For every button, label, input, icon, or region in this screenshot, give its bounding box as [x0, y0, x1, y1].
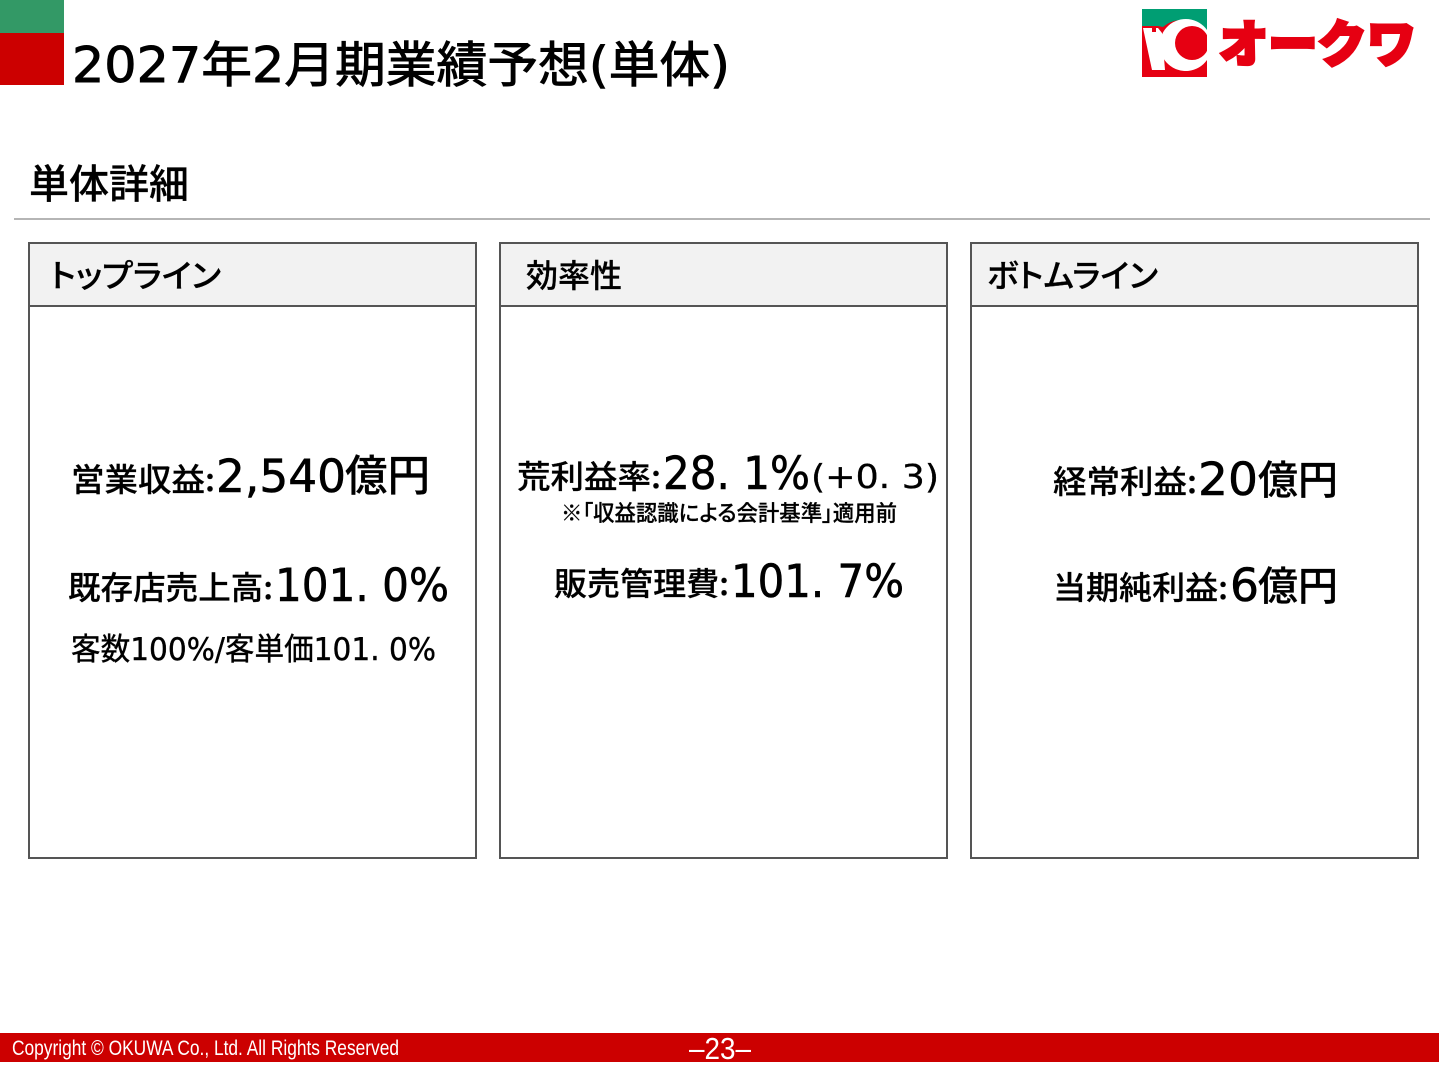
logo: OKUWA [1142, 5, 1416, 77]
title: 2027年2月期業績予想(単体) [72, 37, 730, 94]
panel: bottom line [971, 243, 1418, 858]
metric: SG&amp;A [554, 555, 904, 608]
metric: ordinary profit [1053, 448, 1338, 506]
metric: net profit: 億円 [1258, 554, 1338, 612]
metric: gross margin: 28. 1% [663, 447, 810, 500]
metric: operating revenue: 億円 [345, 442, 430, 504]
metric: gross margin: (+0. 3) [811, 457, 939, 496]
metric: customers and spend: 客数100%/客単価101. 0% [71, 632, 436, 668]
logo mark [1142, 9, 1211, 77]
metric: net profit: 当期純利益: [1053, 563, 1228, 609]
note: accounting standard: ※「収益認識による会計基準」適用前 [561, 496, 897, 528]
metric: net profit [1053, 554, 1338, 612]
metric: ordinary profit: 経常利益: [1053, 457, 1197, 503]
panel: top line [29, 243, 476, 858]
metric: gross margin: 荒利益率: [517, 452, 661, 498]
metric: SG&amp;A: 101. 7% [731, 555, 904, 608]
panel header: 効率性 [526, 251, 622, 297]
footer bar [0, 1031, 1439, 1066]
panel header [29, 244, 476, 307]
metric: SG&amp;A: 販売管理費: [554, 559, 729, 605]
metric: ordinary profit: 億円 [1258, 448, 1338, 506]
panel header: トップライン [50, 251, 221, 297]
section heading: 単体詳細 [29, 152, 189, 210]
metric: existing store sales: 既存店売上高: [68, 563, 273, 609]
panel header: ボトムライン [987, 251, 1158, 297]
corner accent block [0, 0, 64, 85]
metric: existing store sales: 101. 0% [275, 559, 449, 612]
panel header [500, 244, 947, 307]
page number: –23– [689, 1031, 752, 1066]
metric: ordinary profit: 20 [1198, 453, 1258, 506]
metric: existing store sales [68, 559, 449, 612]
metric: operating revenue: 2,540 [216, 450, 346, 503]
metric: operating revenue: 営業収益: [71, 455, 215, 501]
logo wordmark: オークワ [1219, 5, 1416, 77]
panel: efficiency [500, 243, 947, 858]
copyright: Copyright © OKUWA Co., Ltd. All Rights Reserved [12, 1037, 399, 1060]
metric: net profit: 6 [1230, 559, 1259, 612]
metric: operating revenue [71, 442, 430, 504]
metric: gross margin [517, 447, 939, 500]
panel header [971, 244, 1418, 307]
